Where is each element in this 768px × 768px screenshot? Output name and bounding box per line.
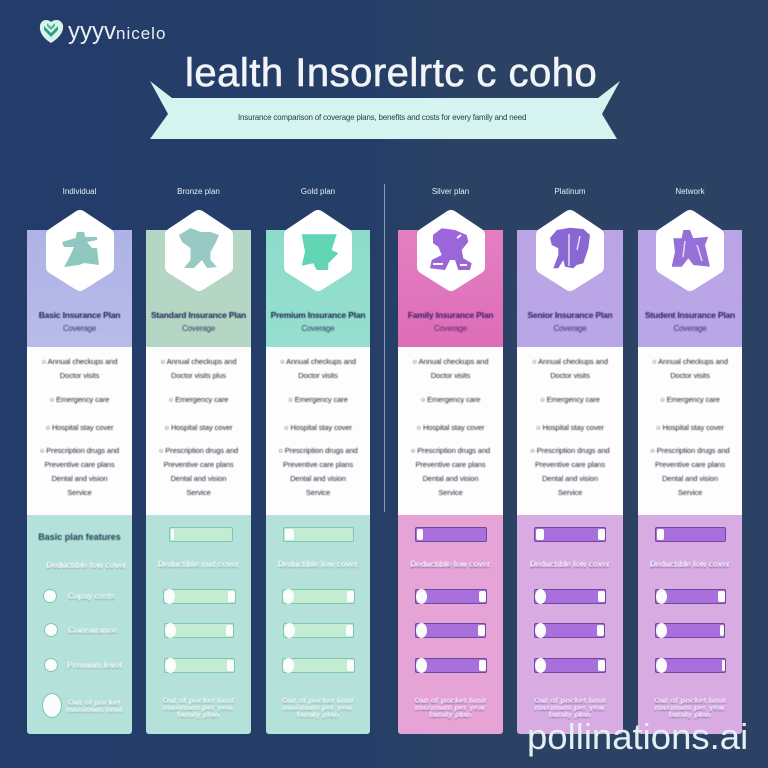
benefit 4: Preventive care plans	[44, 460, 115, 469]
benefit 1	[280, 357, 356, 380]
benefit 4	[158, 446, 238, 497]
header text: Coverage	[63, 324, 96, 333]
row 5: family plan	[549, 710, 591, 719]
row 5: Out of pocket limit	[654, 696, 726, 705]
marker 2	[44, 623, 58, 637]
bar 2	[534, 589, 606, 604]
row 1: Deductible low cover	[46, 561, 127, 570]
column 4	[398, 187, 503, 734]
row 5: maximum per year	[534, 703, 606, 712]
benefit 1: Doctor visits plus	[171, 371, 226, 380]
row 5: maximum per year	[163, 703, 234, 712]
benefit 2: ○ Emergency care	[660, 395, 720, 404]
bar 1	[415, 527, 487, 542]
benefit 1	[652, 357, 728, 380]
column label: Silver plan	[432, 187, 469, 196]
bar 4	[164, 658, 235, 673]
bar 3	[655, 623, 725, 638]
header text: Student Insurance Plan	[645, 310, 735, 320]
benefit 4: Service	[678, 488, 702, 497]
row 3: Coinsurance	[68, 626, 117, 635]
header panel	[146, 230, 251, 347]
benefit 3: ○ Hospital stay cover	[284, 423, 352, 432]
icon: hexagon badge	[417, 210, 485, 292]
row 5	[654, 696, 726, 720]
header panel	[398, 230, 503, 347]
benefit 4: Preventive care plans	[415, 460, 486, 469]
title banner	[150, 81, 620, 139]
column label: Gold plan	[301, 187, 335, 196]
comparison panel	[398, 515, 503, 734]
marker 1	[43, 589, 57, 603]
benefit 4: Service	[438, 488, 463, 497]
header text: Coverage	[553, 324, 587, 333]
benefit 4: Dental and vision	[52, 474, 107, 483]
benefit 3: ○ Hospital stay cover	[165, 423, 232, 432]
comparison panel	[517, 515, 623, 734]
header text: Premium Insurance Plan	[271, 310, 365, 320]
bar 4	[415, 658, 487, 673]
row 5	[534, 696, 606, 720]
header text	[408, 310, 494, 334]
row 2: Copay costs	[68, 592, 115, 601]
header text: Coverage	[182, 324, 215, 333]
benefit 4: ○ Prescription drugs and	[411, 446, 490, 455]
benefit 4: Dental and vision	[662, 474, 718, 483]
bar 2	[163, 589, 236, 604]
column 6	[638, 187, 742, 734]
comparison panel	[27, 515, 132, 734]
header text	[270, 310, 366, 334]
benefit 1: Doctor visits	[670, 371, 710, 380]
benefit 4: Service	[186, 488, 211, 497]
benefit 1: ○ Annual checkups and	[161, 357, 236, 366]
column 1	[27, 187, 132, 734]
benefit 4	[278, 446, 358, 497]
header text: Family Insurance Plan	[408, 310, 493, 320]
benefit 4: Preventive care plans	[163, 460, 234, 469]
row 5: Out of pocket limit	[282, 696, 354, 705]
icon: heart shield	[40, 20, 64, 43]
row 4: Premium level	[67, 661, 122, 670]
row 5: Out of pocket limit	[415, 696, 486, 705]
header panel	[27, 230, 132, 347]
benefit 3: ○ Hospital stay cover	[46, 423, 113, 432]
header text: Standard Insurance Plan	[151, 310, 246, 320]
benefits list	[398, 347, 503, 515]
comparison panel	[266, 515, 370, 734]
benefit 1: ○ Annual checkups and	[413, 357, 488, 366]
row 5: family plan	[297, 710, 339, 719]
benefit 2: ○ Emergency care	[50, 395, 109, 404]
benefits list	[27, 347, 132, 515]
benefit 4: ○ Prescription drugs and	[40, 446, 119, 455]
column label: Bronze plan	[177, 187, 220, 196]
header panel	[266, 230, 370, 347]
row 5: maximum per year	[415, 703, 486, 712]
bar 2	[655, 589, 726, 604]
row 5: Out of pocket limit	[534, 696, 606, 705]
benefit 2: ○ Emergency care	[288, 395, 348, 404]
row 1: Deductible low cover	[650, 560, 730, 569]
benefit 4: ○ Prescription drugs and	[530, 446, 610, 455]
benefit 1: ○ Annual checkups and	[42, 357, 117, 366]
benefit 4: Dental and vision	[423, 474, 478, 483]
benefit 4: Dental and vision	[542, 474, 598, 483]
icon: hexagon badge	[165, 210, 233, 292]
logo wordmark: yyyvnicelo	[68, 18, 166, 45]
header text	[644, 310, 736, 334]
header panel	[517, 230, 623, 347]
row 5	[66, 698, 123, 714]
row 5: family plan	[669, 710, 711, 719]
header text: Basic Insurance Plan	[39, 310, 120, 320]
benefits list	[517, 347, 623, 515]
comparison panel	[638, 515, 742, 734]
benefit 4: Preventive care plans	[655, 460, 725, 469]
benefits list	[638, 347, 742, 515]
icon: hexagon badge	[284, 210, 352, 292]
comparison panel	[146, 515, 251, 734]
bar 4	[534, 658, 606, 673]
row 5: family plan	[177, 710, 220, 719]
benefit 3: ○ Hospital stay cover	[536, 423, 604, 432]
column 3	[266, 187, 370, 734]
bar 1	[169, 527, 233, 542]
benefit 3: ○ Hospital stay cover	[656, 423, 724, 432]
row 1: Deductible low cover	[530, 560, 610, 569]
benefit 4: Dental and vision	[290, 474, 346, 483]
benefit 1: Doctor visits	[550, 371, 590, 380]
row 1: Deductible low cover	[410, 560, 491, 569]
benefit 4: Preventive care plans	[283, 460, 353, 469]
benefit 4	[530, 446, 610, 497]
benefit 1	[160, 357, 237, 380]
header panel	[638, 230, 742, 347]
icon: hexagon badge	[46, 210, 114, 292]
title: lealth Insorelrtc c coho	[185, 51, 597, 95]
bar 3	[164, 623, 234, 638]
header text	[527, 310, 613, 334]
benefit 2: ○ Emergency care	[421, 395, 480, 404]
row 5	[282, 696, 354, 720]
bar 3	[283, 623, 354, 638]
header text: Coverage	[301, 324, 335, 333]
column 2	[146, 187, 251, 734]
column label: Individual	[63, 187, 96, 196]
marker 3	[44, 658, 58, 672]
benefit 1	[412, 357, 489, 380]
benefit 1: ○ Annual checkups and	[652, 357, 728, 366]
row 1: Deductible mid cover	[158, 560, 239, 569]
benefit 2: ○ Emergency care	[169, 395, 228, 404]
row 5: Out of pocket limit	[163, 696, 234, 705]
header text	[38, 310, 121, 334]
benefit 4	[40, 446, 120, 497]
benefit 4: Preventive care plans	[535, 460, 605, 469]
header text: Coverage	[673, 324, 707, 333]
benefit 4: Service	[558, 488, 582, 497]
benefit 2: ○ Emergency care	[540, 395, 600, 404]
header text: Senior Insurance Plan	[527, 310, 613, 320]
bar 4	[655, 658, 726, 673]
benefit 4: ○ Prescription drugs and	[278, 446, 358, 455]
row 5: Out of pocket	[68, 698, 121, 707]
bar 1	[655, 527, 726, 542]
benefit 1: Doctor visits	[431, 371, 470, 380]
benefit 4: Service	[306, 488, 330, 497]
bar 4	[282, 658, 355, 673]
logo	[40, 18, 166, 45]
benefit 4	[650, 446, 730, 497]
benefit 4: Service	[67, 488, 92, 497]
icon: hexagon badge	[536, 210, 604, 292]
header text	[150, 310, 246, 334]
benefits list	[266, 347, 370, 515]
row 5: maximum per year	[654, 703, 726, 712]
divider	[384, 184, 385, 512]
bar 2	[282, 589, 355, 604]
row 1: Deductible low cover	[278, 560, 358, 569]
benefit 1: Doctor visits	[60, 371, 99, 380]
benefit 1: ○ Annual checkups and	[280, 357, 356, 366]
marker 4	[42, 693, 62, 718]
benefit 1	[532, 357, 608, 380]
benefit 4: ○ Prescription drugs and	[159, 446, 238, 455]
row 5	[414, 696, 486, 720]
benefits list	[146, 347, 251, 515]
benefit 4: ○ Prescription drugs and	[650, 446, 730, 455]
benefit 1: Doctor visits	[298, 371, 338, 380]
row 5: maximum per year	[282, 703, 354, 712]
benefit 4	[410, 446, 490, 497]
watermark: pollinations.ai	[527, 716, 748, 757]
row 5: family plan	[429, 710, 472, 719]
column label: Network	[675, 187, 705, 196]
banner subtitle: Insurance comparison of coverage plans, benefits and costs for every family and need	[238, 113, 526, 122]
row 5	[162, 696, 234, 720]
column label: Platinum	[554, 187, 586, 196]
bar 2	[415, 589, 487, 604]
bar 3	[534, 623, 605, 638]
benefit 1	[42, 357, 118, 380]
benefit 3: ○ Hospital stay cover	[417, 423, 484, 432]
header text: Coverage	[434, 324, 467, 333]
icon: hexagon badge	[656, 210, 724, 292]
column 5	[517, 187, 623, 734]
benefit 1: ○ Annual checkups and	[532, 357, 608, 366]
panel heading: Basic plan features	[38, 532, 121, 542]
benefit 4: Dental and vision	[171, 474, 226, 483]
row 5: maximum limit	[66, 705, 123, 714]
bar 3	[415, 623, 486, 638]
bar 1	[534, 527, 606, 542]
bar 1	[283, 527, 354, 542]
